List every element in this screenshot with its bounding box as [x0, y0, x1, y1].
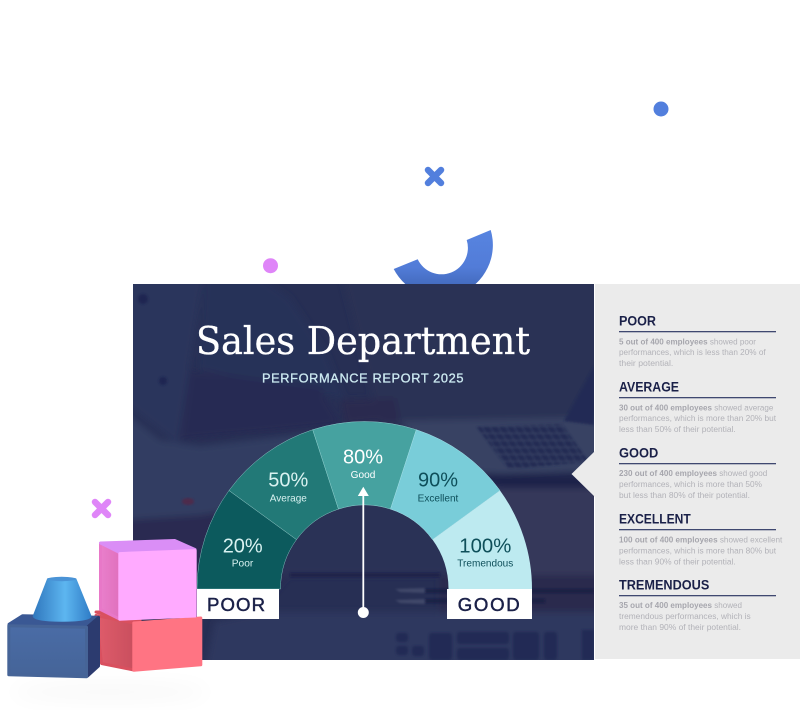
legend: good: performances, which is more than 50%: [619, 479, 762, 489]
legend: poor: their potential.: [619, 358, 673, 368]
panel: legend background: [595, 284, 800, 659]
blue block: [9, 616, 98, 677]
label: 20% Poor: Poor: [232, 558, 254, 570]
heading: excellent: EXCELLENT: [619, 511, 691, 526]
legend: excellent: [619, 511, 783, 566]
label: 100% Tremendous: 100%: [459, 534, 511, 557]
needle arrow: [358, 487, 369, 618]
decorative half ring arc: [394, 230, 493, 297]
legend: tremendous: more than 90% of their potential.: [619, 622, 741, 632]
heading: average: AVERAGE: [619, 380, 679, 395]
legend: excellent: less than 90% of their potential.: [619, 556, 736, 566]
label: 80% Good: 80%: [343, 445, 383, 468]
label: 20% Poor: [223, 534, 263, 570]
legend: average: less than 50% of their potential.: [619, 424, 736, 434]
title: Sales Department: [196, 319, 530, 364]
segment: average: [229, 430, 338, 540]
poor end label: POOR: [207, 594, 265, 615]
good end label: GOOD: [458, 594, 520, 615]
legend: average: 30 out of 400 employees showed average: [619, 402, 774, 412]
legend: tremendous: tremendous performances, which is: [619, 611, 751, 621]
label: 90% Excellent: Excellent: [418, 492, 458, 504]
decorative dot: pink: [263, 258, 278, 273]
label: 20% Poor: 20%: [223, 534, 263, 557]
label: 80% Good: Good: [351, 469, 376, 481]
icon: 3D blocks: [9, 540, 201, 677]
legend: average: performances, which is more than 20% but: [619, 413, 777, 423]
cone: [33, 577, 92, 622]
decorative cross: pink: [95, 502, 108, 515]
heading: good: GOOD: [619, 446, 659, 461]
subtitle: PERFORMANCE REPORT 2025: [262, 370, 464, 385]
red block: [96, 612, 201, 670]
decorative cross: blue: [428, 170, 441, 183]
legend: excellent: 100 out of 400 employees showed excellent: [619, 534, 783, 544]
segment: tremendous: [432, 490, 532, 589]
label: 90% Excellent: [418, 469, 458, 504]
segment: excellent: [390, 430, 500, 540]
ground shadow: [10, 681, 210, 703]
label: 90% Excellent: 90%: [418, 469, 458, 492]
poor end label: [197, 589, 279, 619]
label: 50% Average: [268, 469, 308, 504]
legend: excellent: performances, which is more than 80% but: [619, 545, 777, 555]
heading: tremendous: TREMENDOUS: [619, 577, 709, 592]
panel: photo background: [133, 284, 594, 660]
segment: poor: [197, 490, 296, 589]
legend: tremendous: 35 out of 400 employees showed: [619, 600, 742, 610]
legend: good: [619, 446, 776, 500]
legend: good: but less than 80% of their potential.: [619, 490, 750, 500]
segment: good: [313, 421, 416, 509]
legend: poor: performances, which is less than 20% of: [619, 347, 766, 357]
legend: good: 230 out of 400 employees showed good: [619, 468, 768, 478]
label: 50% Average: Average: [270, 492, 307, 504]
label: 100% Tremendous: Tremendous: [457, 558, 513, 570]
heading: poor: POOR: [619, 314, 656, 329]
legend: tremendous: [619, 577, 776, 632]
pink block: [100, 540, 195, 619]
label: 80% Good: [343, 445, 383, 481]
good end label: [447, 589, 532, 619]
legend: poor: 5 out of 400 employees showed poor: [619, 336, 756, 346]
legend: average: [619, 380, 777, 434]
gauge chart: [197, 421, 532, 619]
pointer notch: [572, 451, 595, 497]
legend: poor: [619, 314, 776, 368]
decorative dot: blue: [654, 102, 668, 116]
label: 50% Average: 50%: [268, 469, 308, 492]
label: 100% Tremendous: [457, 534, 513, 570]
